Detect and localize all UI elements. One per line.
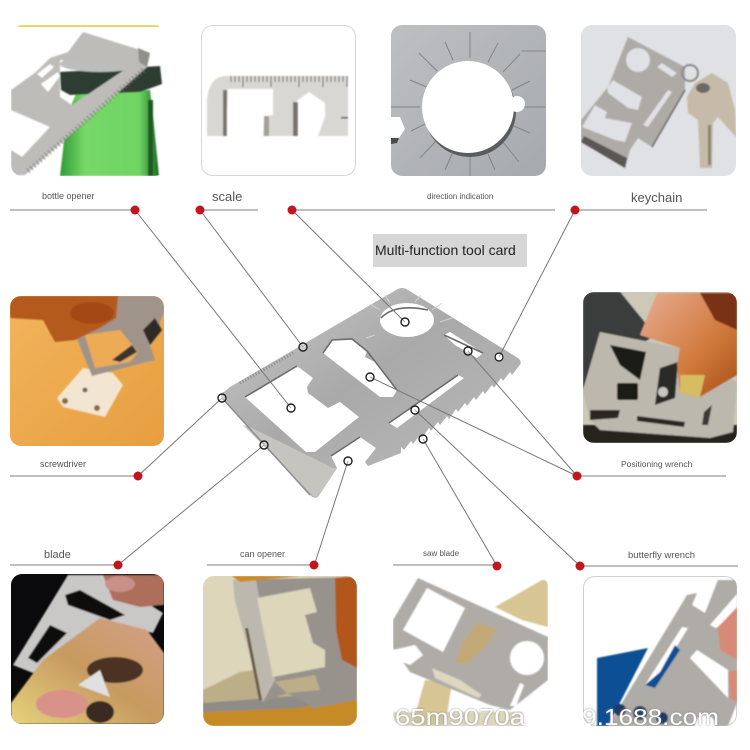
red anchor dots [114, 206, 584, 570]
callout rings on card [218, 318, 503, 465]
watermark text left: 65m9070a [395, 704, 525, 730]
label: butterfly wrench: butterfly wrench [628, 550, 695, 561]
label: screwdriver: screwdriver [40, 459, 86, 469]
label: direction indication: direction indication [427, 192, 493, 201]
panel: bottle opener photo [11, 24, 166, 176]
panel: screwdriver photo [10, 296, 165, 446]
panel: saw blade photo [393, 576, 548, 730]
panel: keychain photo [581, 25, 736, 176]
label underlines [10, 210, 738, 566]
label: blade: blade [44, 549, 71, 561]
label: saw blade: saw blade [423, 549, 460, 558]
watermark text right: 9.1688.com [582, 704, 719, 730]
central tool card [221, 288, 521, 498]
panel: direction indication photo [391, 25, 546, 176]
leader lines [118, 210, 580, 566]
label: bottle opener: bottle opener [42, 191, 95, 201]
panel: scale photo [201, 25, 356, 176]
panel: can opener photo [203, 575, 357, 726]
panel: positioning wrench photo [583, 292, 737, 443]
title: Multi-function tool card [375, 242, 516, 258]
label: keychain: keychain [631, 190, 682, 205]
panel: butterfly wrench photo [582, 576, 737, 735]
panel: blade photo [11, 574, 164, 724]
title [373, 234, 527, 267]
label: can opener: can opener [240, 549, 285, 559]
label: scale: scale [212, 189, 242, 204]
blade bevel [243, 425, 337, 497]
label: positioning wrench: Positioning wrench [621, 459, 693, 469]
